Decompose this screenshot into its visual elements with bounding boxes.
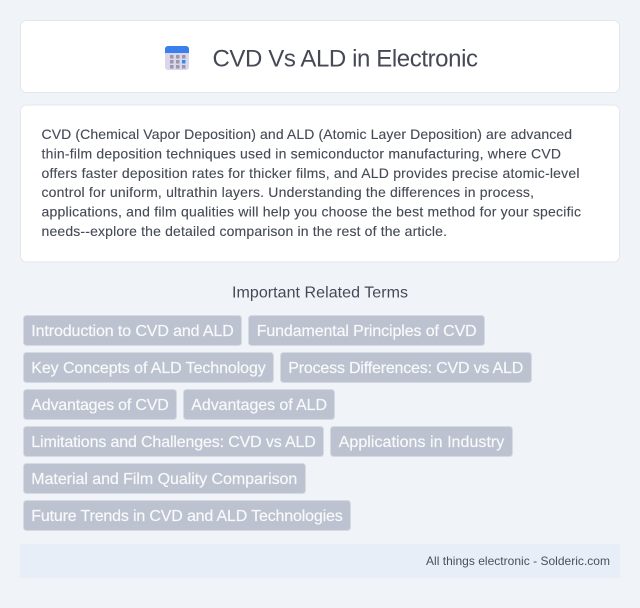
title: CVD Vs ALD in Electronic [212, 46, 478, 72]
footer [20, 544, 620, 578]
tag: applications in industry: Applications in Industry [339, 434, 504, 451]
text block: description: offers faster deposition rates for thicker films, and ALD provides precise atomic-level [42, 165, 580, 181]
tag: limitations and challenges [24, 426, 324, 456]
tag: fundamental principles [248, 316, 484, 346]
tag: advantages of CVD [24, 390, 176, 420]
tag: future trends: Future Trends in CVD and ALD Technologies [31, 508, 343, 525]
tag: material and film quality [24, 464, 306, 494]
text block: description: applications, and film qualities will help you choose the best method for your specific [42, 204, 581, 220]
text block: description: control for uniform, ultrathin layers. Understanding the differences in process, [42, 184, 534, 200]
tag: process differences [280, 352, 532, 382]
tag: advantages of CVD: Advantages of CVD [31, 397, 169, 414]
text block: description: CVD (Chemical Vapor Deposition) and ALD (Atomic Layer Deposition) are advanced [42, 126, 572, 142]
tag: applications in industry [330, 426, 512, 456]
tag: key concepts: Key Concepts of ALD Technology [31, 360, 266, 377]
tag: advantages of ALD [184, 390, 334, 420]
tag: process differences: Process Differences: CVD vs ALD [288, 360, 523, 377]
heading: related terms: Important Related Terms [232, 284, 408, 302]
tag: introduction: Introduction to CVD and ALD [31, 323, 234, 340]
text block: description [42, 126, 581, 239]
tag: material and film quality: Material and Film Quality Comparison [31, 471, 297, 488]
tag: fundamental principles: Fundamental Principles of CVD [257, 323, 477, 340]
tag: future trends [24, 500, 350, 530]
panel: related term tags [24, 316, 532, 530]
tag: limitations and challenges: Limitations and Challenges: CVD vs ALD [31, 434, 316, 451]
tag: key concepts [24, 352, 274, 382]
footer text: All things electronic - Solderic.com [426, 554, 610, 568]
tag: advantages of ALD: Advantages of ALD [191, 397, 327, 414]
panel: header [20, 20, 620, 92]
tag: introduction [24, 316, 242, 346]
panel: description [20, 105, 620, 262]
text block: description: thin-film deposition techniques used in semiconductor manufacturing, where CVD [42, 145, 561, 161]
icon: calendar [165, 46, 189, 70]
text block: description: needs--explore the detailed comparison in the rest of the article. [42, 223, 447, 239]
